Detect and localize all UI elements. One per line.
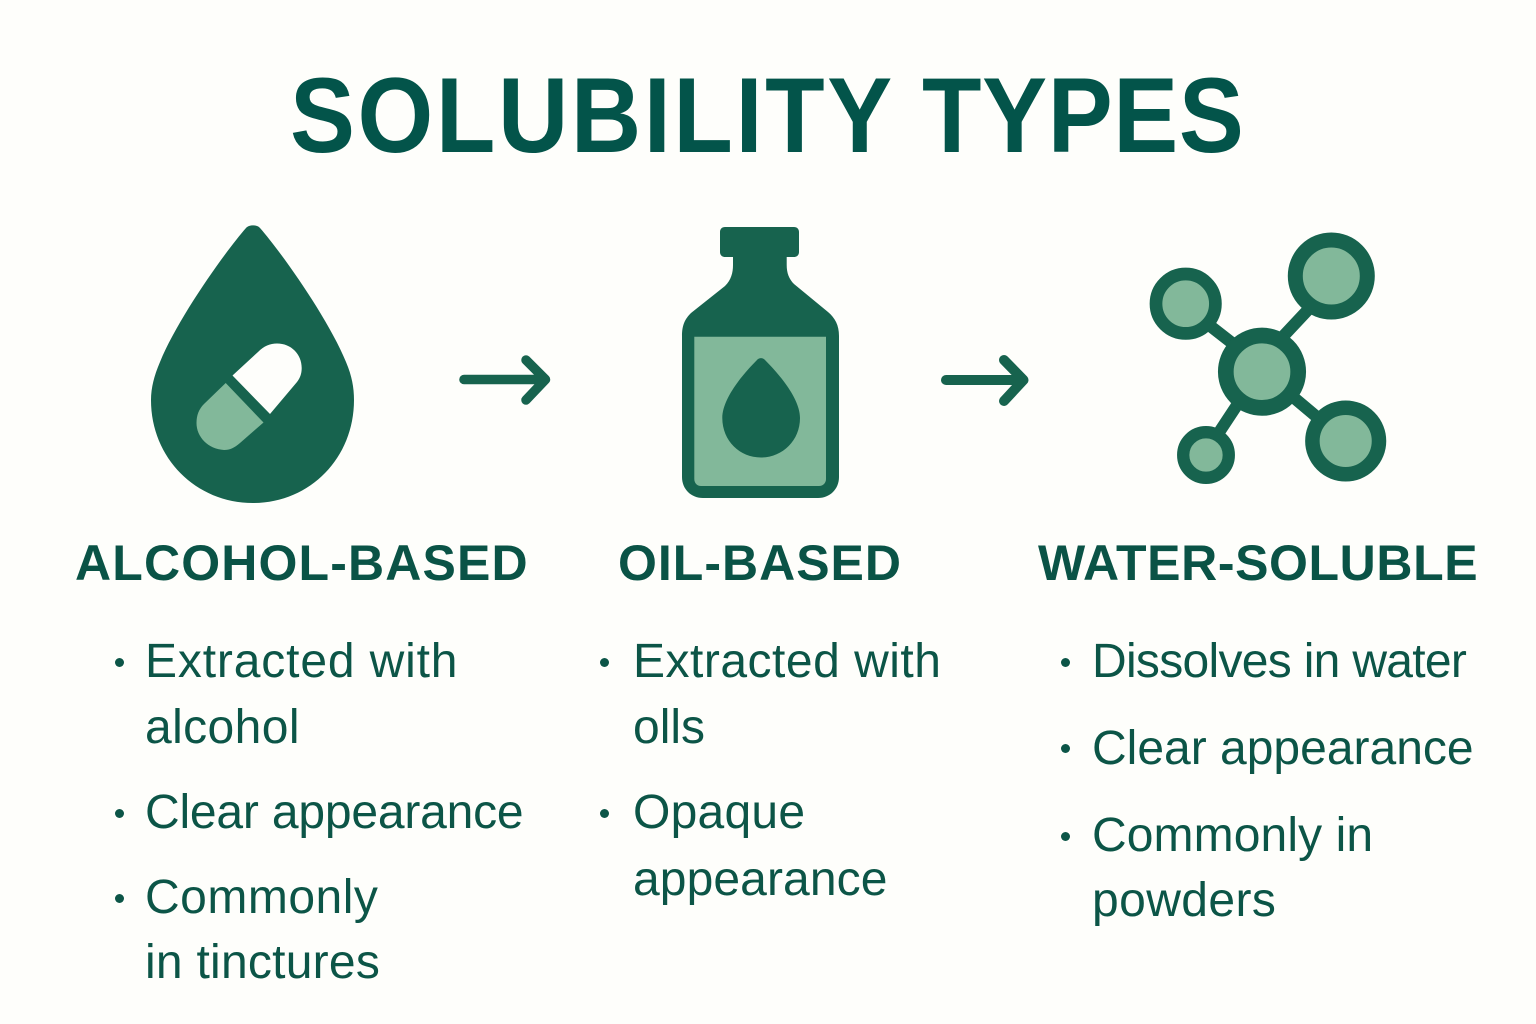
list: water-soluble (1061, 635, 1474, 927)
list: water-soluble: Commonly in (1092, 809, 1373, 862)
list: alcohol-based: alcohol (145, 701, 300, 754)
icon: molecule (1156, 240, 1379, 478)
heading: alcohol-based: ALCOHOL-BASED (75, 535, 529, 591)
list: oil-based: Opaque (633, 786, 805, 839)
list: water-soluble: powders (1092, 874, 1276, 927)
title (290, 55, 1244, 175)
list: alcohol-based: in tinctures (145, 936, 380, 989)
title: TYPES (922, 55, 1244, 175)
heading: water-soluble: WATER-SOLUBLE (1038, 535, 1478, 591)
list: oil-based (600, 635, 941, 906)
list: alcohol-based: Commonly (145, 871, 378, 924)
list: alcohol-based: Clear appearance (145, 786, 523, 839)
heading: oil-based: OIL-BASED (618, 535, 902, 591)
list: water-soluble: Clear appearance (1092, 722, 1474, 775)
list: oil-based: olls (633, 701, 705, 754)
title: SOLUBILITY (290, 55, 894, 175)
icon: bottle (682, 227, 839, 498)
icon: drop with capsule (151, 225, 354, 503)
list: oil-based: Extracted with (633, 635, 941, 688)
arrow 2 (946, 360, 1024, 401)
list: alcohol-based (115, 635, 523, 989)
list: alcohol-based: Extracted with (145, 635, 458, 688)
arrow 1 (464, 360, 546, 400)
list: water-soluble: Dissolves in water (1092, 635, 1466, 688)
list: oil-based: appearance (633, 853, 888, 906)
